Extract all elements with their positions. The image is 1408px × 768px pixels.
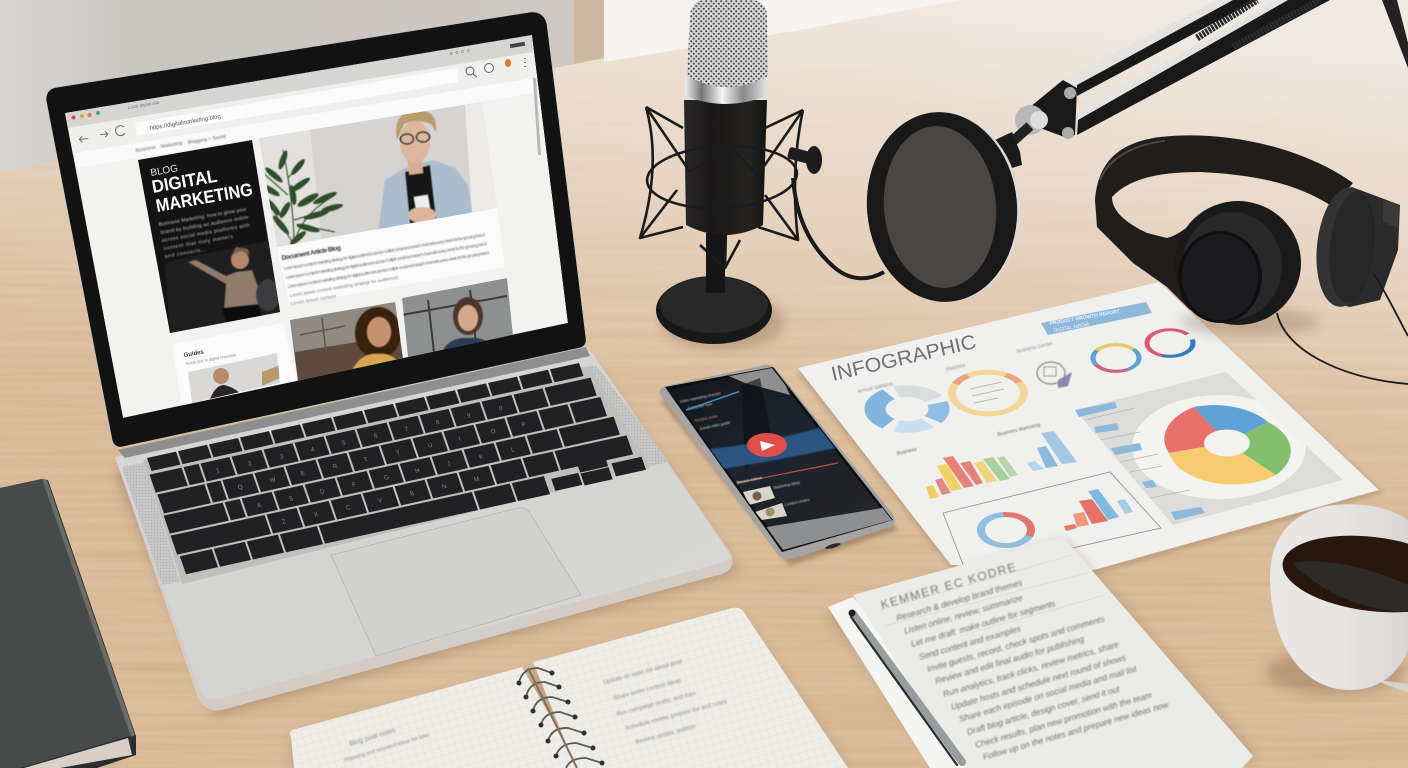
phone text: Video marketing channel (679, 391, 721, 404)
browser chrome (65, 35, 534, 155)
poster blog label: BLOG (150, 163, 179, 179)
gooseneck (793, 178, 884, 278)
red and blue bars (1064, 489, 1133, 531)
cup body (1270, 504, 1408, 690)
keyboard (144, 357, 647, 575)
poster body copy: content that truly matters (163, 234, 234, 252)
mic base (656, 276, 772, 344)
boxed panel (943, 472, 1161, 572)
page scribbles: Update on topic list about post (603, 659, 683, 686)
page scribbles (344, 659, 728, 764)
ring chart A (1093, 345, 1139, 371)
lower bar (1066, 0, 1330, 138)
panel side tags (1075, 402, 1117, 417)
headphone shadow (1180, 308, 1320, 336)
spiral binding (519, 668, 602, 768)
blue band (710, 427, 836, 470)
poster body copy: across social media platforms with (161, 223, 250, 244)
video thumbnails (743, 486, 775, 505)
url text: https://digitalmarketing.blog (149, 114, 221, 132)
podcast microphone (640, 0, 884, 350)
play button (747, 433, 787, 457)
blue donut chart (875, 391, 939, 427)
nav labels (135, 134, 227, 154)
phone text: Related posts (694, 414, 718, 423)
page scribbles: Blog post notes (349, 727, 397, 748)
search icon (466, 67, 477, 77)
blue bar chart (1027, 431, 1077, 471)
small sheet labels: Annual statistics (857, 381, 894, 395)
shift key row (171, 435, 633, 555)
article body lines: Lorem ipsum content (290, 293, 337, 306)
smartphone (660, 362, 898, 566)
keyboard well (143, 366, 650, 584)
photo: curly-haired woman (290, 302, 408, 385)
notepad backing (828, 597, 1000, 768)
key legends: ASDFGHJKL (256, 446, 516, 510)
space bar row (177, 448, 647, 574)
page scribbles: Share some content ideas (613, 678, 682, 702)
page scribbles: Run campaign drafts, and then (616, 691, 697, 718)
mic base shadow (660, 294, 784, 350)
reflection (729, 368, 790, 395)
phone screen bezel (665, 367, 893, 552)
battery (510, 42, 525, 48)
front notch (439, 617, 529, 647)
status icons: oooo (449, 47, 473, 57)
silver bolts (1064, 87, 1076, 99)
silver ring (685, 76, 768, 104)
coloured bar chart (926, 456, 1018, 499)
scrollbar (533, 78, 541, 155)
upper bar (1060, 0, 1257, 100)
shock mount knob (787, 146, 822, 174)
article body lines: Lorem ipsum content marketing strategy for audiences (289, 275, 399, 298)
QWERTY key row (157, 397, 607, 513)
woman with glasses (378, 111, 472, 229)
phone screen (668, 370, 889, 548)
handwritten notes (879, 560, 1170, 762)
plant (259, 150, 343, 247)
main blog photo (259, 102, 497, 247)
screen (65, 35, 568, 418)
nav labels: Marketing (160, 140, 183, 150)
navigation arrows (79, 131, 108, 142)
pen (848, 610, 962, 765)
home key row (164, 417, 620, 534)
coffee cup (1265, 504, 1408, 694)
handwritten notes: Research & develop brand themes (895, 577, 1024, 623)
headphone cables (1277, 273, 1408, 384)
laptop shadow (115, 360, 740, 716)
ear cup right (1311, 184, 1400, 310)
mic stem (706, 233, 725, 293)
window dots (72, 111, 100, 120)
phone body (660, 365, 895, 559)
charging port (825, 542, 841, 550)
handwritten notes: Draft blog article, design cover, send it out (966, 684, 1121, 737)
reload icon (116, 126, 125, 136)
mesh grille (687, 0, 768, 87)
trackpad (331, 508, 581, 656)
handwritten notepad (826, 537, 1260, 768)
center icon (1037, 362, 1072, 388)
back wall and window (0, 0, 960, 172)
pie panel (1075, 372, 1343, 525)
banner: PRODUCT GROWTH REPORT (1049, 309, 1120, 327)
article heading: Document Article Blog (281, 245, 341, 262)
ruled lines (880, 555, 1105, 636)
cup handle (1378, 680, 1408, 692)
handwritten notes: KEMMER EC KODRE (879, 560, 1019, 612)
blog poster (138, 140, 285, 340)
ear cup left (1175, 201, 1301, 325)
handwritten notes: Let me draft: make outline for segments (910, 598, 1057, 649)
tab title: Local digital site (127, 100, 160, 110)
poster body copy: and converts... (164, 247, 207, 260)
phone text: Social video guide (699, 421, 730, 431)
child figure (188, 247, 280, 322)
laptop (46, 12, 740, 716)
dark closed book (0, 479, 136, 768)
key legends: ZXCVBNM (281, 476, 480, 526)
pop filter (859, 106, 1030, 308)
pie chart (1164, 405, 1291, 484)
handwritten notes: Share each episode on social media and mail list (958, 663, 1138, 724)
handwritten notes: Send content and examples (918, 623, 1023, 662)
coffee surface (1292, 561, 1408, 612)
small sheet labels: Statistics (945, 362, 966, 373)
infographic title: INFOGRAPHIC (829, 331, 978, 386)
banner (1041, 302, 1152, 335)
mic body (684, 100, 767, 235)
phone text (679, 391, 810, 507)
half donut (981, 514, 1031, 546)
screen lid (46, 12, 586, 447)
shock mount (640, 107, 803, 268)
article body lines: Lorem ipsum content marketing strategy for digital audiences across multiple social and search channels every week for the growing brand (285, 241, 488, 280)
yellow ring chart (952, 372, 1024, 414)
small sheet labels (857, 341, 1054, 457)
nav labels: Business (135, 145, 157, 154)
small blog card: Guides (183, 349, 205, 359)
address bar (135, 68, 458, 136)
article panel (277, 208, 505, 305)
handwritten notes: Run analytics, track clicks, review metrics, share (942, 639, 1120, 699)
page scribbles: Planning and keyword ideas for later (344, 732, 431, 764)
key legends: 1234567890 (215, 405, 504, 475)
notepad page (853, 537, 1253, 768)
poster body copy (158, 207, 250, 260)
handwritten notes: Follow up on the notes and prepare new ideas now (982, 699, 1170, 762)
bottom grey strip (767, 508, 892, 550)
headphones (1095, 135, 1408, 384)
right page (533, 608, 848, 768)
poster title: DIGITAL (150, 166, 219, 197)
hinge (118, 347, 590, 458)
spiral notebook (290, 608, 850, 768)
sheet paper (798, 282, 1379, 570)
function key row (147, 363, 583, 471)
cup shadow (1265, 650, 1405, 694)
handwritten notes: Update hosts and schedule next round of shows (950, 652, 1128, 712)
menu dots (524, 58, 526, 67)
right support bar (1382, 0, 1408, 68)
article body lines: Lorem ipsum content marketing strategy for digital audiences across multiple social and search channels every week for the growing brand (287, 250, 490, 289)
joint plate (1030, 80, 1077, 138)
handwritten notes: Invite guests, record, check spots and comments (926, 613, 1106, 674)
laptop base (115, 347, 733, 710)
key legends (215, 401, 541, 536)
coffee (1278, 526, 1408, 622)
number key row (150, 378, 597, 493)
small blog card (172, 323, 298, 410)
profile icon (484, 64, 494, 72)
handwritten notes: Review and edit final audio for publishing (934, 634, 1085, 686)
article body lines (283, 232, 490, 306)
phone text: Content review (784, 498, 810, 507)
key legends: QWERTYUIOP (237, 421, 527, 491)
book page edge (24, 738, 132, 768)
article body lines: Lorem ipsum content marketing strategy for digital audiences across multiple social and search channels every week for the growing brand (283, 232, 486, 271)
small sheet labels: Business Center (1016, 341, 1054, 355)
progress line (737, 463, 838, 483)
small sheet labels: Business Marketing (997, 422, 1041, 438)
handwritten notes: Check results, plan new promotion with the team (974, 690, 1153, 750)
blog poster: MARKETING (154, 179, 254, 216)
small blog card: Some text in digital channels (185, 352, 236, 366)
phone text: Marketing ideas (773, 480, 801, 490)
page scribbles: Review update, publish (635, 724, 696, 746)
photo: smiling woman (402, 278, 513, 362)
sheet shadow (796, 287, 1384, 574)
banner: DIGITAL MEDIA (1053, 322, 1091, 334)
infographic sheet (796, 282, 1384, 574)
arm springs (1197, 0, 1320, 47)
left page (290, 667, 580, 768)
small sheet labels: Business (896, 446, 918, 457)
speaker grilles (122, 463, 180, 585)
ring chart B (1147, 330, 1193, 356)
page scribbles: Schedule review, prepare list and notes (625, 699, 728, 732)
handwritten notes: Listen online, review, summarize (903, 592, 1024, 636)
notepad shadow (826, 540, 1260, 768)
boom arm (1015, 0, 1408, 139)
phone text: Recent videos (736, 476, 762, 485)
orange badge (505, 59, 511, 67)
nav labels: Blogging + Social (187, 134, 227, 146)
poster body copy: brand by building an audience online (160, 215, 249, 236)
poster body copy: Business Marketing: how to grow your (158, 207, 247, 228)
phone shadow (660, 372, 898, 566)
headband (1095, 135, 1353, 310)
phone text: Subscribe now (687, 402, 713, 411)
